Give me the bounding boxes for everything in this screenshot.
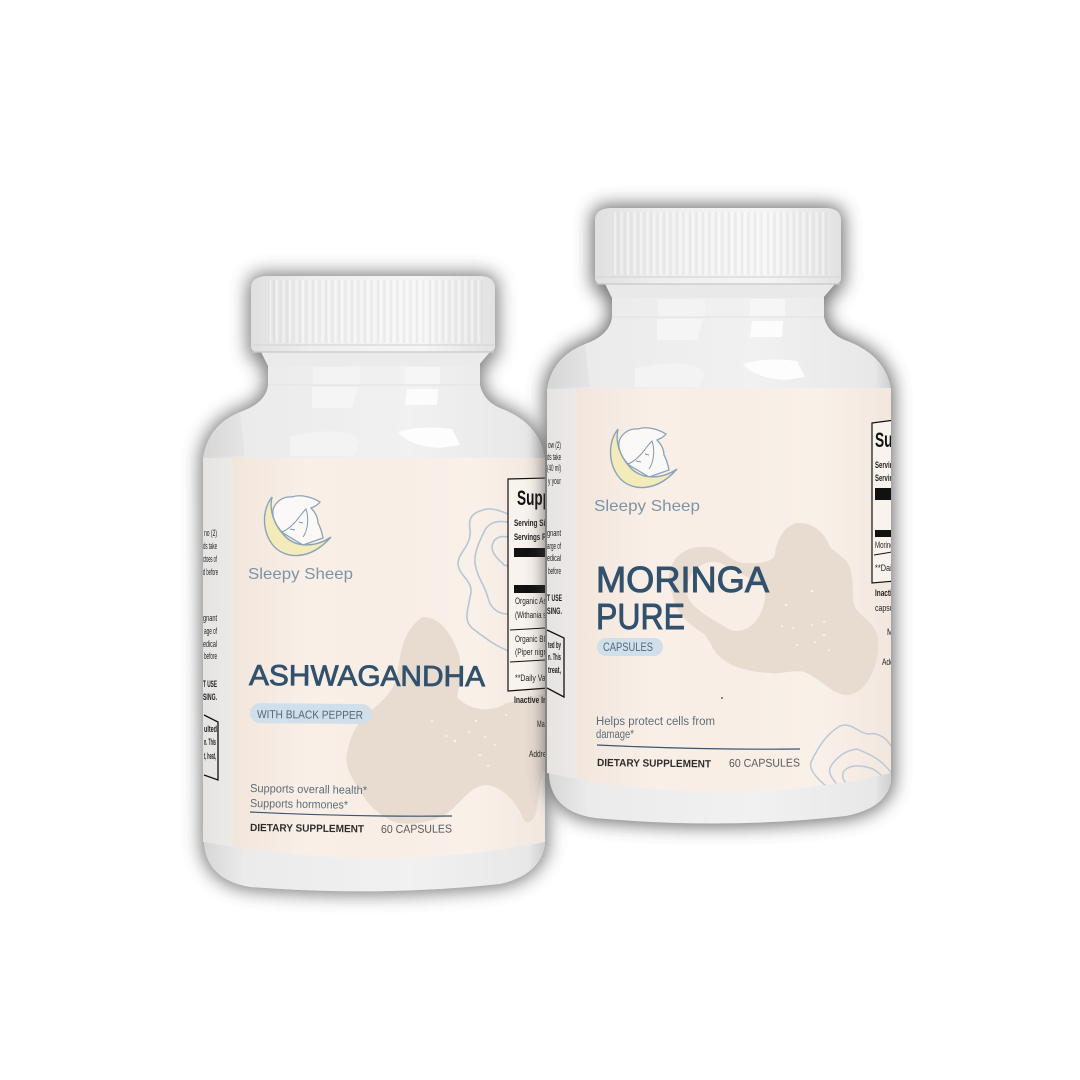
pill: with black pepper: WITH BLACK PEPPER [257, 709, 363, 722]
benefits: damage* [596, 729, 634, 741]
left wrap text: SING. [547, 606, 562, 616]
product title: PURE [596, 596, 685, 637]
pill: capsules [597, 638, 663, 656]
left wrap text: n. This [548, 652, 561, 662]
left wrap text [547, 440, 564, 697]
left wrap text: ow (2) [548, 440, 561, 450]
label: t, heat, [204, 751, 216, 761]
ribbed cap [251, 276, 495, 352]
supplement facts panel: Organic Ashw [515, 596, 555, 606]
speckles [431, 714, 507, 767]
decorative blob with cut-out [669, 523, 878, 695]
bottle: Ashwagandha [203, 276, 555, 891]
brand name: Sleepy Sheep [248, 566, 353, 583]
product title: MORINGA [596, 559, 769, 600]
supplement facts panel: Supp [517, 487, 551, 510]
shoulder reflections [548, 299, 824, 387]
footer rule [597, 745, 800, 749]
capsule count: 60 CAPSULES [729, 758, 800, 770]
collar under cap [261, 352, 490, 366]
logo: Sleepy Sheep [264, 496, 331, 556]
benefits [596, 716, 715, 741]
left wrap text: (40 ml) [547, 463, 561, 473]
left wrap text: ulted [204, 724, 217, 734]
pill: with black pepper [250, 703, 372, 724]
supplement facts panel: Serving [875, 460, 897, 470]
decorative blob [346, 617, 546, 824]
supplement facts panel: (Withania som [515, 610, 555, 620]
supplement facts panel: **Daily [875, 563, 897, 573]
shadow halo behind Moringa bottle [547, 208, 891, 824]
ribbed cap [595, 208, 841, 284]
left wrap text: arge of [547, 541, 561, 551]
small dark speck [721, 697, 723, 699]
supplement facts panel: M [887, 627, 893, 637]
supplement facts panel: Servings [875, 473, 900, 483]
supplement facts panel: Inactive Ingr [514, 695, 554, 705]
label [547, 388, 901, 813]
label: ctoes of [203, 554, 217, 564]
brand name: Sleepy Sheep [594, 498, 700, 515]
supplement facts panel: Manu [537, 719, 551, 729]
left wrap text: ds take [547, 452, 561, 462]
shadow halo behind Ashwagandha bottle [203, 276, 545, 891]
left wrap text: no (2) [204, 528, 217, 538]
supplement facts panel: Address [529, 749, 553, 759]
supplement facts panel: Moringa [875, 540, 897, 550]
left wrap text: ds take [203, 541, 217, 551]
footer rule [250, 812, 452, 816]
label: n. This [204, 737, 216, 747]
product title: ASHWAGANDHA [249, 660, 486, 693]
contour line art [811, 725, 893, 790]
logo: Sleepy Sheep [610, 428, 677, 488]
left wrap text: SING. [203, 692, 217, 702]
supplement facts panel: Organic Black [515, 634, 555, 644]
label [203, 458, 555, 878]
bottle body [203, 360, 545, 891]
left wrap text: edical [547, 553, 561, 563]
benefits: Supports overall health* [250, 783, 368, 797]
benefits: Helps protect cells from [596, 716, 715, 728]
supplement facts panel: (Piper nigrum [515, 647, 555, 657]
left wrap text [203, 528, 218, 780]
collar under cap [605, 284, 835, 298]
left wrap text: edical [203, 639, 217, 649]
left wrap text: before [548, 566, 561, 576]
supplement facts panel: **Daily Value [515, 673, 555, 683]
supplement facts panel: Addr [882, 657, 896, 667]
capsule count: 60 CAPSULES [381, 824, 452, 836]
shoulder reflections [204, 367, 480, 456]
left wrap text: gnant [547, 528, 561, 538]
benefits [250, 784, 367, 810]
label: d before [203, 567, 218, 577]
benefits: Supports hormones* [250, 798, 349, 812]
left wrap text: treat, [548, 665, 561, 675]
supplement facts panel: Servings Per [514, 532, 552, 542]
dietary supplement: DIETARY SUPPLEMENT [250, 822, 365, 835]
supplement facts panel [871, 420, 891, 665]
supplement facts panel: Inactive [875, 588, 899, 598]
left wrap text: before [204, 651, 217, 661]
left wrap text: ted by [548, 640, 561, 650]
bottle body [547, 292, 891, 824]
supplement facts panel: capsule [875, 603, 899, 613]
supplement facts panel: Sup [875, 429, 901, 452]
speckles [781, 590, 830, 651]
left wrap text: y your [548, 476, 561, 486]
bottle: Moringa Pure [547, 208, 901, 824]
left wrap text: T USE [203, 679, 217, 689]
supplement facts panel: Serving Size [514, 518, 552, 528]
supplement facts panel [507, 478, 545, 757]
contour line art [458, 509, 512, 652]
pill: capsules: CAPSULES [603, 642, 653, 654]
left wrap text: gnant [203, 613, 217, 623]
dietary supplement: DIETARY SUPPLEMENT [597, 757, 712, 770]
left wrap text: T USE [547, 593, 562, 603]
left wrap text: age of [204, 626, 217, 636]
